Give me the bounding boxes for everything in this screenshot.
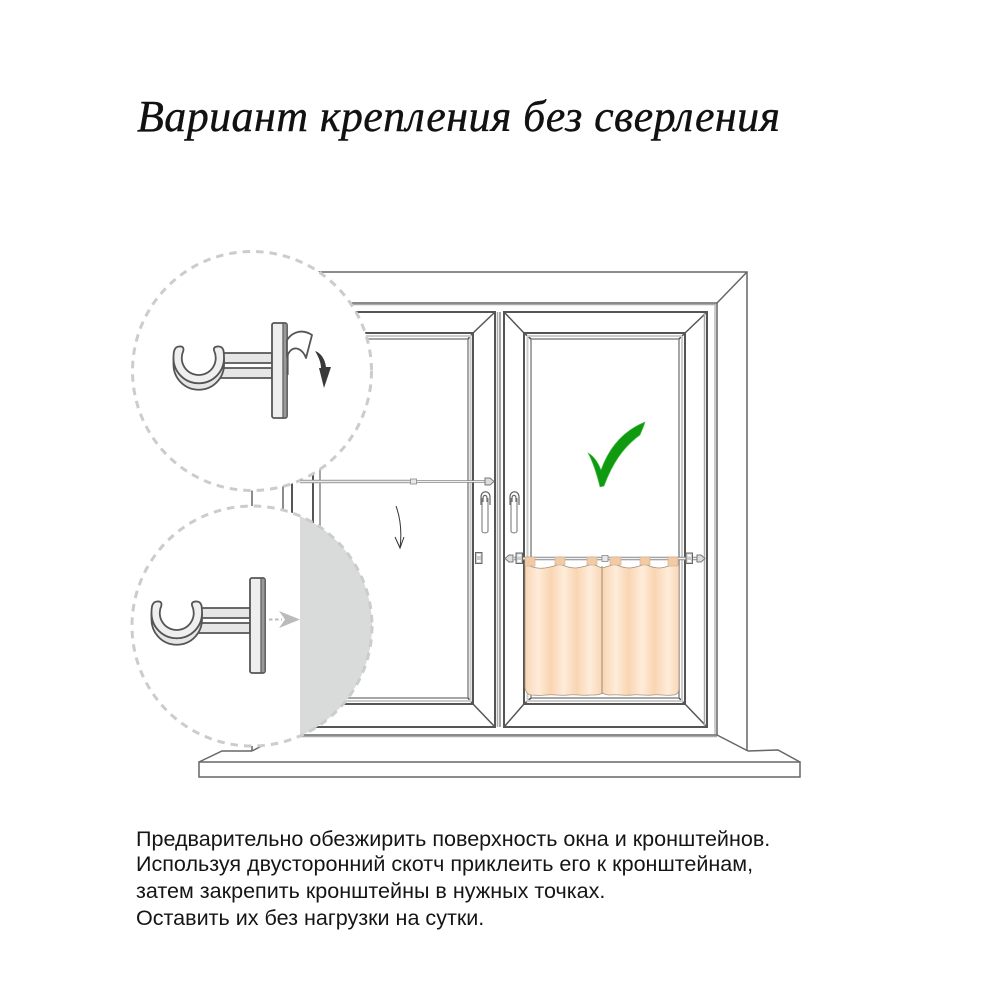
black rotation arrow bbox=[315, 351, 331, 388]
dashed arrow to the surface bbox=[269, 611, 300, 628]
detail circle: tape on bracket bbox=[132, 252, 372, 490]
window illustration bbox=[199, 272, 800, 777]
curtain tabs bbox=[525, 557, 678, 566]
left handle bbox=[481, 492, 490, 533]
curtain bbox=[505, 553, 705, 695]
bracket with tape bbox=[174, 323, 312, 418]
detail circle: bracket pressed to window bbox=[132, 506, 372, 746]
curved arrow: rod moves down bbox=[395, 506, 404, 548]
bracket bbox=[152, 578, 265, 673]
left sash bbox=[292, 312, 500, 727]
instruction text: Оставить их без нагрузки на сутки. bbox=[136, 905, 484, 930]
title: Вариант крепления без сверления bbox=[137, 92, 780, 141]
sill bbox=[199, 750, 800, 777]
rod being mounted on left sash bbox=[300, 478, 494, 485]
green check mark bbox=[588, 422, 645, 487]
instruction text: Используя двусторонний скотч приклеить его к кронштейнам, bbox=[136, 851, 753, 876]
left hinge bbox=[476, 552, 482, 564]
curtain centre seam bbox=[601, 566, 603, 694]
instruction text: Предварительно обезжирить поверхность окна и кронштейнов. bbox=[136, 826, 770, 851]
curtain panels bbox=[525, 564, 679, 695]
instruction text bbox=[136, 826, 770, 930]
instruction text: затем закрепить кронштейны в нужных точках. bbox=[136, 878, 605, 903]
right handle bbox=[510, 492, 519, 533]
grey window surface bbox=[300, 516, 372, 736]
window opening: wall reveal bbox=[252, 272, 748, 751]
tape flap bbox=[287, 332, 312, 358]
rod brackets bbox=[516, 553, 692, 564]
right sash bbox=[504, 312, 707, 727]
curtain rod bbox=[505, 555, 705, 562]
